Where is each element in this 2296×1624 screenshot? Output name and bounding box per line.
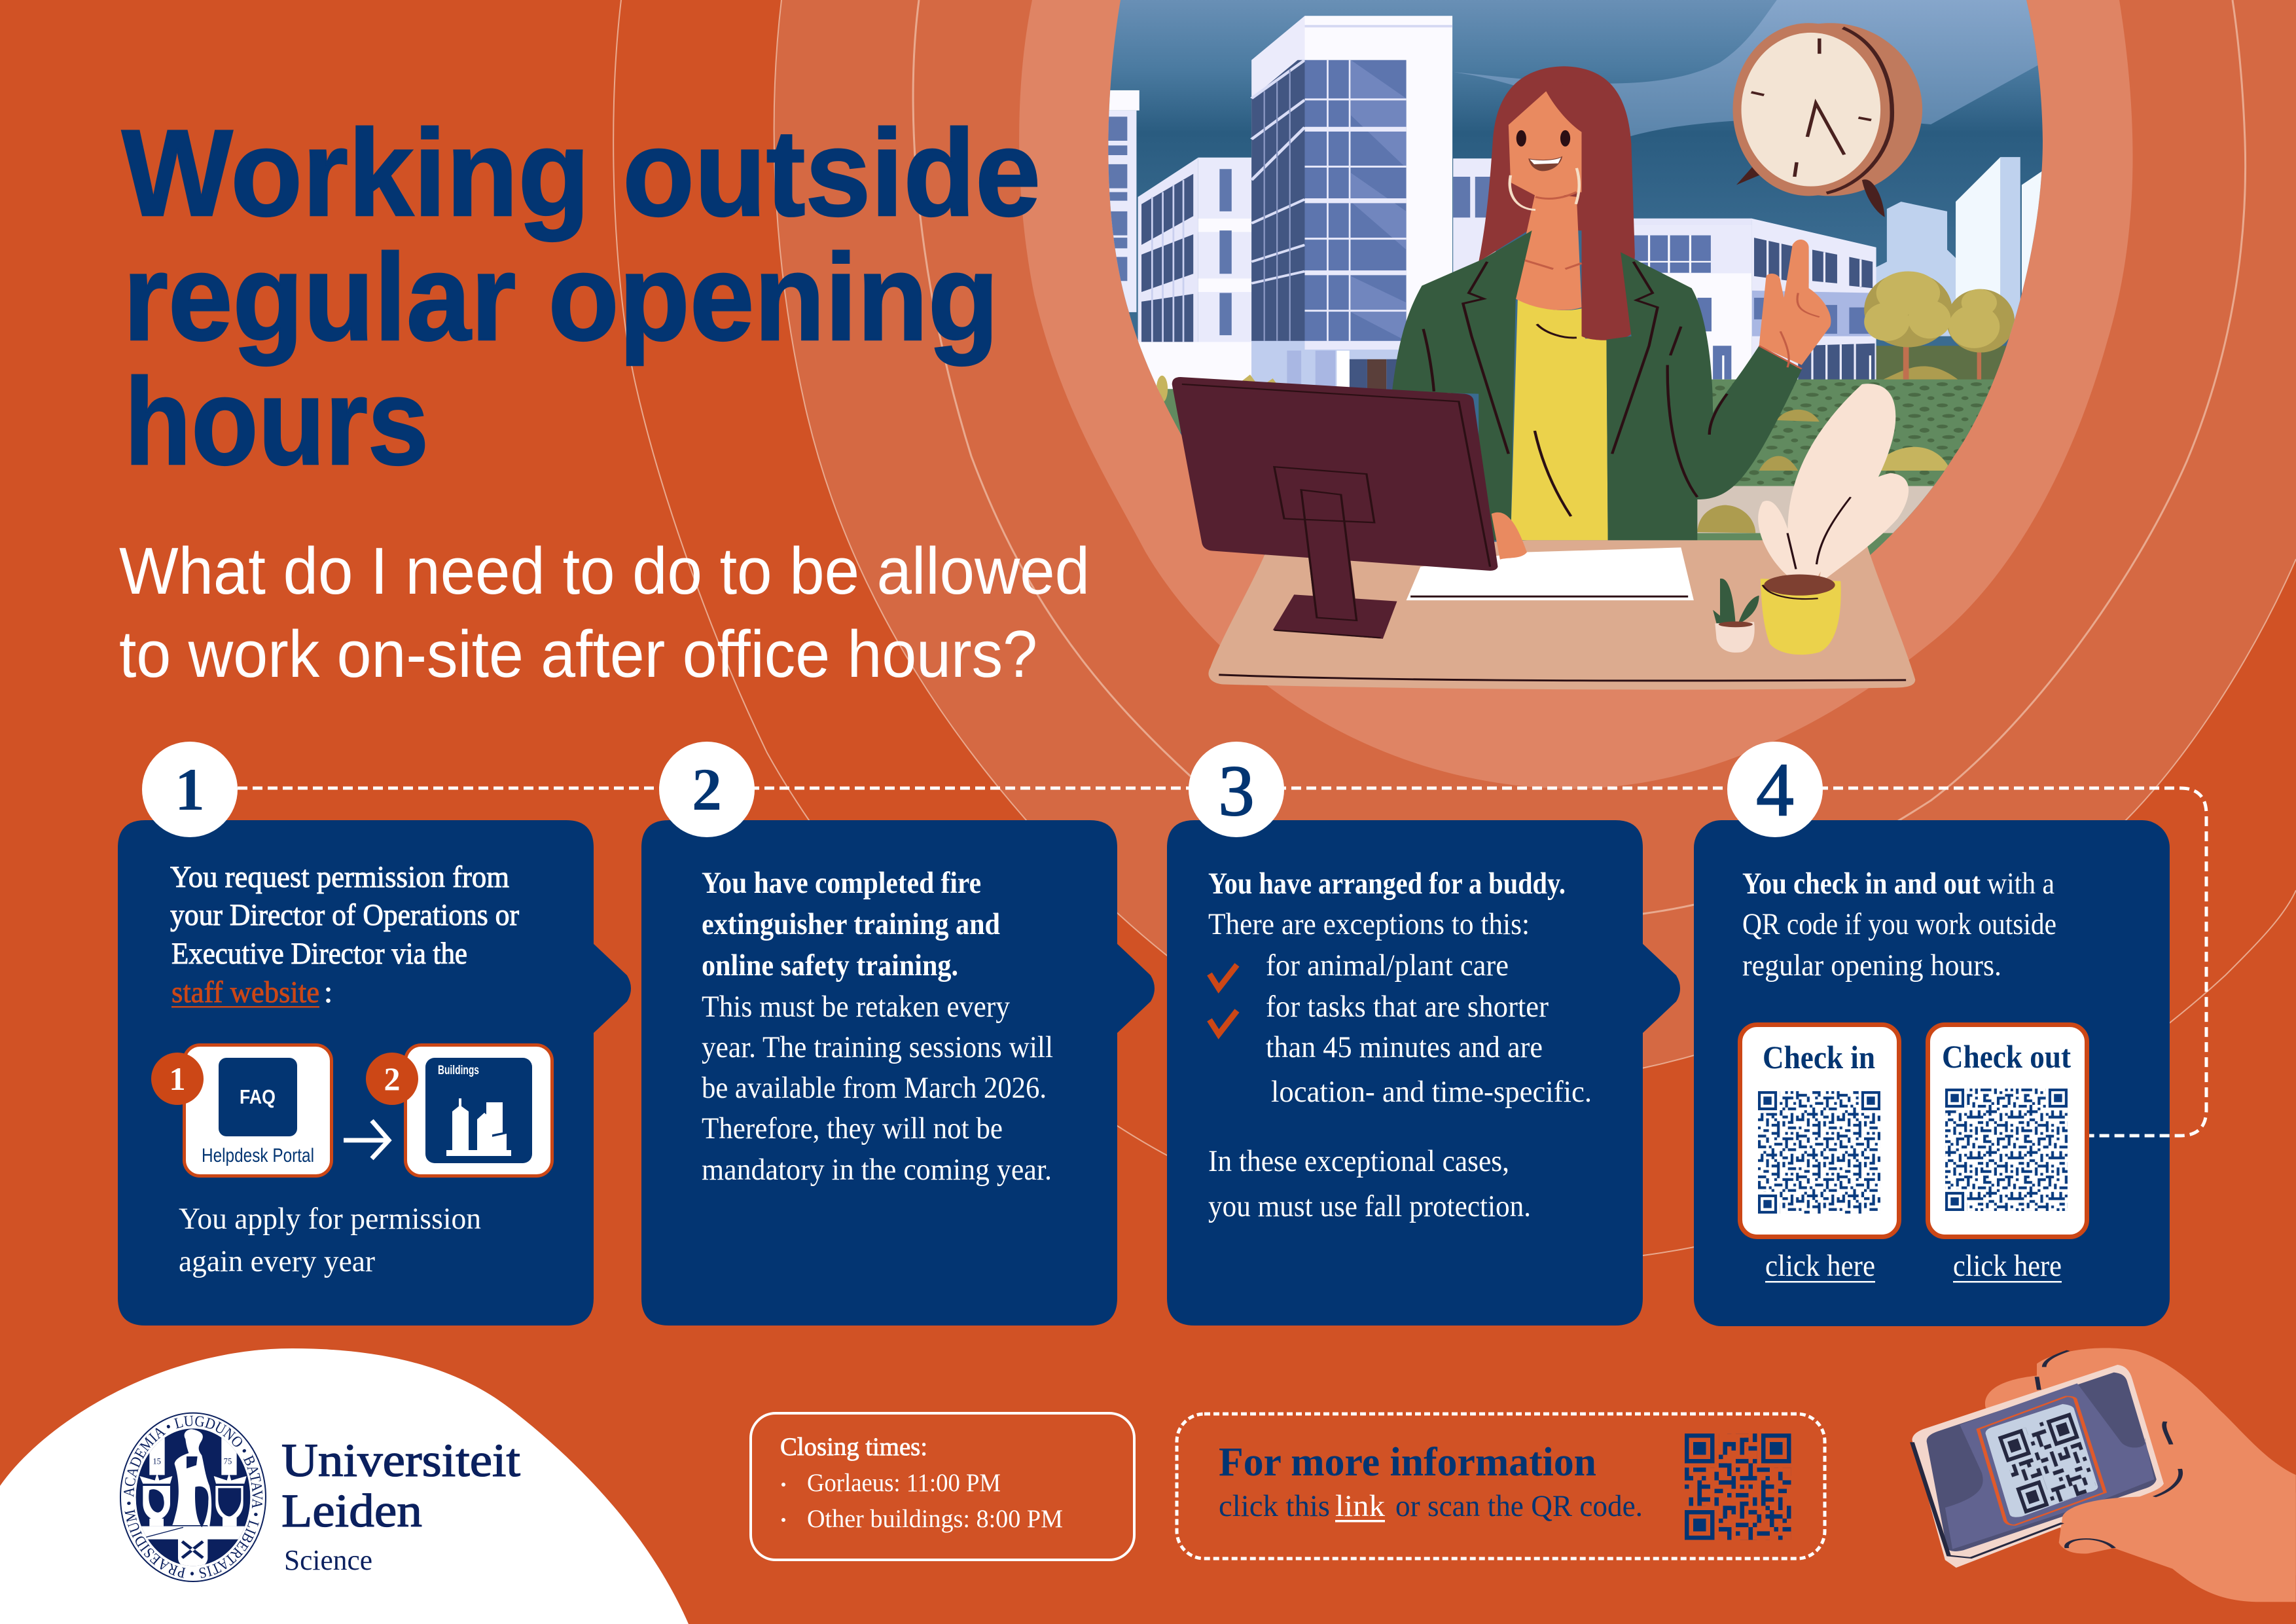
number badge: 1	[142, 742, 238, 837]
text: step 2: mandatory in the coming year.	[702, 1153, 1052, 1187]
dashed connector line	[238, 788, 2206, 1136]
icon: university seal: ACADEMIA • LUGDUNO • BATAVA • LIBERTATIS • PRAESIDIUM •	[124, 1415, 263, 1578]
text: step 1 request	[170, 860, 519, 1009]
text: step 1 request: your Director of Operations or	[170, 898, 519, 932]
number badge: 3	[1189, 742, 1284, 837]
logo text: Science	[284, 1544, 372, 1576]
subtitle: to work on-site after office hours?	[119, 618, 1037, 691]
icon: potted plant	[1713, 384, 1909, 655]
hand on desk	[1492, 513, 1527, 560]
logo text: Leiden	[281, 1485, 422, 1537]
number badge: 1: 1	[175, 756, 205, 823]
text: step 4: regular opening hours.	[1742, 948, 2001, 983]
QR code: check in	[1758, 1091, 1880, 1214]
icon: check mark	[1210, 965, 1237, 988]
text: step 2: extinguisher training and	[702, 907, 1000, 941]
text: step 4	[1742, 867, 2056, 983]
QR code on phone	[1998, 1413, 2097, 1514]
text: step 1 request: You request permission from	[170, 860, 509, 894]
text: step 2: You have completed fire	[702, 866, 981, 900]
card: check in QR	[1740, 1025, 1899, 1237]
text: step 3: You have arranged for a buddy.	[1208, 867, 1566, 901]
title: Working outside	[122, 104, 1041, 242]
text: step 3: In these exceptional cases,	[1208, 1144, 1509, 1178]
text: step 3: for tasks that are shorter	[1266, 990, 1549, 1024]
white hill behind logo	[0, 1348, 689, 1624]
badge: 2: 2	[384, 1060, 401, 1097]
card: buildings	[406, 1045, 552, 1176]
callout: for more information: or scan the QR code.	[1395, 1489, 1643, 1523]
text: step 3	[1208, 867, 1592, 1223]
title: hours	[124, 353, 429, 490]
title	[122, 104, 1041, 490]
text: step 4: QR code if you work outside	[1742, 907, 2056, 941]
icon: university seal: 15	[152, 1457, 161, 1466]
number badge: 2: 2	[692, 756, 722, 823]
icon: check mark	[1210, 1011, 1237, 1034]
callout: closing times	[751, 1413, 1134, 1560]
card: buildings: Buildings	[438, 1064, 479, 1077]
text: step 3: than 45 minutes and are	[1266, 1030, 1543, 1064]
icon: computer monitor	[1172, 377, 1498, 639]
text: apply again	[179, 1202, 481, 1278]
badge: 1: 1	[169, 1060, 186, 1097]
panel: step 1 request permission	[118, 820, 631, 1326]
panel: step 4 check in and out	[1694, 820, 2170, 1326]
text: step 2: online safety training.	[702, 948, 958, 983]
text: step 3: location- and time-specific.	[1271, 1075, 1592, 1109]
panel: step 3 buddy	[1167, 820, 1680, 1326]
number badge: 4: 4	[1756, 748, 1794, 831]
card: check in QR: Check in	[1763, 1039, 1875, 1075]
text: step 2: Therefore, they will not be	[702, 1111, 1003, 1146]
text: step 2: be available from March 2026.	[702, 1071, 1047, 1105]
card: check out QR: Check out	[1942, 1038, 2071, 1075]
callout: closing times: Other buildings: 8:00 PM	[807, 1505, 1063, 1533]
text: step 4: You check in and out	[1742, 867, 1981, 901]
text: step 2: year. The training sessions will	[702, 1030, 1053, 1064]
card: helpdesk portal: FAQ	[240, 1085, 276, 1108]
card: helpdesk portal: Helpdesk Portal	[202, 1145, 314, 1166]
logo text: Universiteit	[281, 1434, 520, 1487]
QR code: check out	[1945, 1089, 2068, 1211]
text: step 2: This must be retaken every	[702, 990, 1010, 1024]
illustration: campus scene in round window	[1108, 0, 2043, 555]
logo text	[281, 1434, 520, 1576]
text: step 1 request: staff website	[171, 975, 319, 1009]
text: step 4: with a	[1987, 867, 2054, 901]
badge: 2	[366, 1053, 418, 1105]
QR code: more information	[1685, 1434, 1791, 1540]
illustration: woman, clock, desk, monitor and plant	[1172, 23, 1922, 690]
callout: closing times: Closing times:	[780, 1433, 927, 1461]
link: click here check out: click here	[1953, 1249, 2062, 1283]
text: step 3: you must use fall protection.	[1208, 1189, 1531, 1223]
text: step 1 request: :	[324, 975, 332, 1009]
arrow	[344, 1121, 389, 1159]
callout: for more information: For more information	[1219, 1440, 1596, 1485]
panel: step 2 training	[641, 820, 1155, 1326]
paper on desk	[1407, 547, 1694, 600]
callout: for more information: click this	[1219, 1489, 1330, 1523]
text: step 2	[702, 866, 1053, 1187]
subtitle: What do I need to do to be allowed	[119, 535, 1090, 608]
subtitle	[119, 535, 1090, 691]
title: regular opening	[123, 228, 999, 366]
desk	[1208, 540, 1915, 690]
number badge: 2	[659, 742, 755, 837]
background rings	[613, 0, 2296, 1261]
logo: Universiteit Leiden	[120, 1413, 521, 1582]
text: step 3: There are exceptions to this:	[1208, 907, 1530, 941]
text: apply again: again every year	[179, 1244, 375, 1278]
callout: for more information: link	[1335, 1489, 1386, 1523]
text: apply again: You apply for permission	[179, 1202, 481, 1236]
card: helpdesk portal	[185, 1045, 331, 1176]
text: step 3: for animal/plant care	[1266, 948, 1509, 983]
icon: city buildings	[446, 1098, 511, 1156]
number badge: 4	[1727, 742, 1823, 837]
figure: woman	[1392, 66, 1831, 540]
illustration: hand holding phone	[1912, 1348, 2296, 1602]
card: check out QR	[1928, 1025, 2087, 1237]
text: step 1 request: Executive Director via the	[171, 937, 467, 971]
icon: wall clock	[1733, 23, 1922, 217]
icon: university seal: 75	[224, 1457, 232, 1466]
link: click here check in: click here	[1765, 1249, 1875, 1283]
callout: for more information	[1177, 1414, 1825, 1559]
number badge: 3: 3	[1219, 751, 1254, 831]
badge: 1	[151, 1053, 204, 1105]
callout: closing times: Gorlaeus: 11:00 PM	[807, 1469, 1001, 1497]
